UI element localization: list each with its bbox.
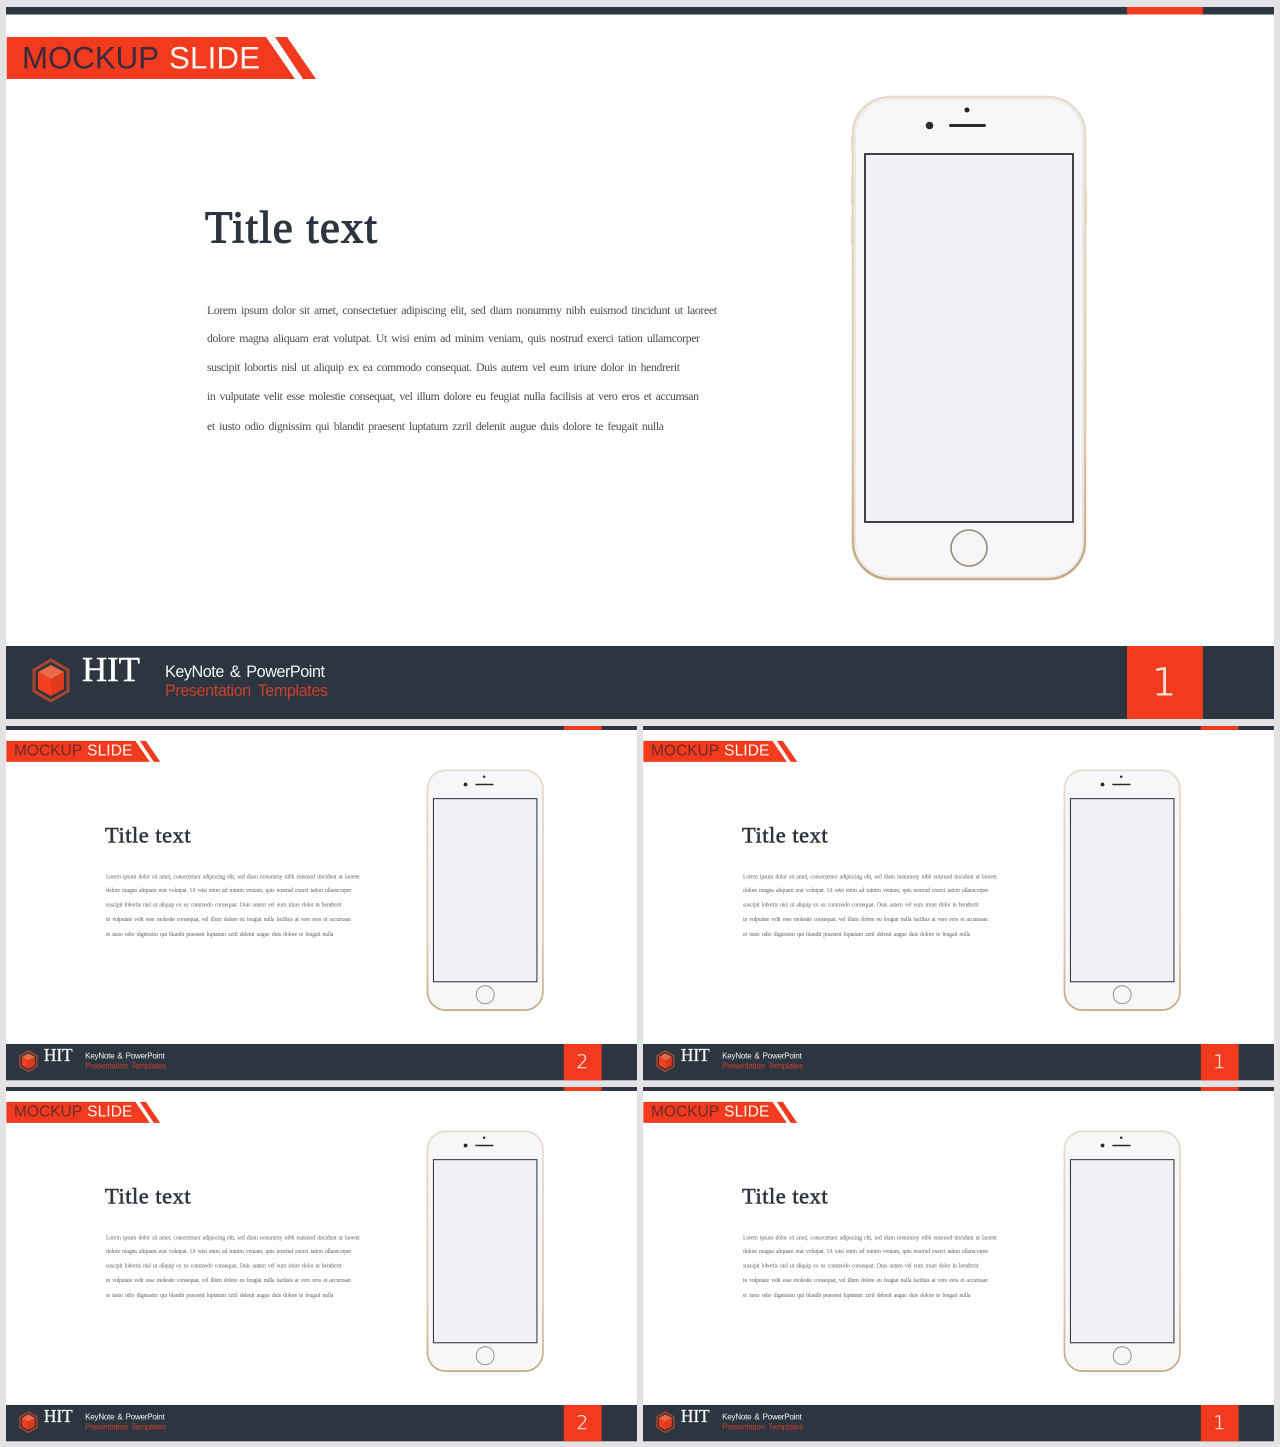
footer bar xyxy=(6,646,1274,719)
tagline xyxy=(165,663,328,700)
body text: dolore magna aliquam erat volutpat. Ut wisi enim ad minim veniam, quis nostrud exerci tation ullamcorper xyxy=(106,1249,351,1255)
tagline: KeyNote & PowerPoint xyxy=(165,663,326,681)
body text: in vulputate velit esse molestie consequat, vel illum dolore eu feugiat nulla facilisis at vero eros et accumsan xyxy=(106,916,351,923)
title: Title text xyxy=(105,1183,191,1208)
brand name: HIT xyxy=(82,650,140,689)
slide 5: small mockup slide, bottom right xyxy=(643,1087,1274,1441)
title: Title text xyxy=(742,1183,828,1208)
banner: mockup slide xyxy=(643,1102,797,1123)
body text: Lorem ipsum dolor sit amet, consectetuer adipiscing elit, sed diam nonummy nibh euismod tincidunt ut laoreet xyxy=(743,1235,997,1241)
banner: mockup slide: MOCKUP xyxy=(14,1104,82,1121)
page number: 2 xyxy=(576,1411,589,1434)
body text: in vulputate velit esse molestie consequat, vel illum dolore eu feugiat nulla facilisis at vero eros et accumsan xyxy=(743,1277,988,1284)
top bar xyxy=(6,726,637,730)
title: Title text xyxy=(742,822,828,847)
tagline: KeyNote & PowerPoint xyxy=(85,1412,165,1421)
banner: mockup slide: SLIDE xyxy=(724,743,769,760)
banner: mockup slide: MOCKUP xyxy=(651,1104,719,1121)
body text: dolore magna aliquam erat volutpat. Ut wisi enim ad minim veniam, quis nostrud exerci tation ullamcorper xyxy=(743,1249,988,1255)
brand name: HIT xyxy=(681,1045,710,1065)
icon: phone mockup xyxy=(427,770,544,1010)
icon: hexagon cube logo xyxy=(34,660,68,701)
body text xyxy=(743,874,997,938)
body text xyxy=(207,303,718,433)
banner: mockup slide: MOCKUP xyxy=(22,40,159,76)
tagline: KeyNote & PowerPoint xyxy=(722,1412,802,1421)
banner: mockup slide: SLIDE xyxy=(87,1104,132,1121)
page number xyxy=(1201,1044,1239,1080)
banner: mockup slide xyxy=(643,741,797,762)
banner: mockup slide: MOCKUP xyxy=(14,743,82,760)
banner: mockup slide xyxy=(6,741,160,762)
top bar xyxy=(6,7,1274,14)
icon: hexagon cube logo xyxy=(657,1051,674,1071)
footer bar xyxy=(643,1044,1274,1080)
body text: et iusto odio dignissim qui blandit praesent luptatum zzril delenit augue duis dolore te feugait nulla xyxy=(207,419,665,433)
body text: suscipit lobortis nisl ut aliquip ex ea commodo consequat. Duis autem vel eum iriure dolor in hendrerit xyxy=(207,360,681,374)
icon: phone mockup xyxy=(852,97,1086,579)
tagline: KeyNote & PowerPoint xyxy=(85,1051,165,1060)
tagline: Presentation Templates xyxy=(85,1061,166,1070)
body text: suscipit lobortis nisl ut aliquip ex ea commodo consequat. Duis autem vel eum iriure dolor in hendrerit xyxy=(106,903,342,909)
body text xyxy=(106,1235,360,1299)
body text: dolore magna aliquam erat volutpat. Ut wisi enim ad minim veniam, quis nostrud exerci tation ullamcorper xyxy=(106,888,351,894)
tagline xyxy=(722,1051,803,1070)
banner: mockup slide: SLIDE xyxy=(87,743,132,760)
tagline: KeyNote & PowerPoint xyxy=(722,1051,802,1060)
body text: in vulputate velit esse molestie consequat, vel illum dolore eu feugiat nulla facilisis at vero eros et accumsan xyxy=(207,389,699,403)
tagline: Presentation Templates xyxy=(722,1422,803,1431)
tagline: Presentation Templates xyxy=(722,1061,803,1070)
page number: 2 xyxy=(576,1050,589,1073)
tagline xyxy=(85,1051,166,1070)
page number xyxy=(564,1044,602,1080)
body text: Lorem ipsum dolor sit amet, consectetuer adipiscing elit, sed diam nonummy nibh euismod tincidunt ut laoreet xyxy=(743,874,997,880)
tagline: Presentation Templates xyxy=(165,682,328,700)
page number: 1 xyxy=(1151,660,1177,706)
body text: et iusto odio dignissim qui blandit praesent luptatum zzril delenit augue duis dolore te feugait nulla xyxy=(106,931,334,938)
banner: mockup slide xyxy=(6,1102,160,1123)
banner: mockup slide: SLIDE xyxy=(169,40,260,76)
page number xyxy=(1201,1405,1239,1441)
page number: 1 xyxy=(1213,1050,1226,1073)
brand name: HIT xyxy=(44,1045,73,1065)
body text xyxy=(743,1235,997,1299)
icon: hexagon cube logo xyxy=(20,1412,37,1432)
body text: et iusto odio dignissim qui blandit praesent luptatum zzril delenit augue duis dolore te feugait nulla xyxy=(106,1292,334,1299)
icon: hexagon cube logo xyxy=(20,1051,37,1071)
slide 1: large mockup slide xyxy=(6,7,1274,719)
tagline xyxy=(85,1412,166,1431)
icon: phone mockup xyxy=(1064,1131,1181,1371)
body text: Lorem ipsum dolor sit amet, consectetuer adipiscing elit, sed diam nonummy nibh euismod tincidunt ut laoreet xyxy=(207,303,718,317)
footer bar xyxy=(643,1405,1274,1441)
icon: phone mockup xyxy=(1064,770,1181,1010)
body text: dolore magna aliquam erat volutpat. Ut wisi enim ad minim veniam, quis nostrud exerci tation ullamcorper xyxy=(207,331,700,345)
body text: dolore magna aliquam erat volutpat. Ut wisi enim ad minim veniam, quis nostrud exerci tation ullamcorper xyxy=(743,888,988,894)
title: Title text xyxy=(105,822,191,847)
body text: et iusto odio dignissim qui blandit praesent luptatum zzril delenit augue duis dolore te feugait nulla xyxy=(743,1292,971,1299)
body text: Lorem ipsum dolor sit amet, consectetuer adipiscing elit, sed diam nonummy nibh euismod tincidunt ut laoreet xyxy=(106,874,360,880)
page number xyxy=(564,1405,602,1441)
banner: mockup slide: SLIDE xyxy=(724,1104,769,1121)
footer bar xyxy=(6,1405,637,1441)
body text: suscipit lobortis nisl ut aliquip ex ea commodo consequat. Duis autem vel eum iriure dolor in hendrerit xyxy=(743,903,979,909)
body text: suscipit lobortis nisl ut aliquip ex ea commodo consequat. Duis autem vel eum iriure dolor in hendrerit xyxy=(106,1264,342,1270)
brand name: HIT xyxy=(44,1406,73,1426)
top bar xyxy=(643,1087,1274,1091)
tagline: Presentation Templates xyxy=(85,1422,166,1431)
slide 2: small mockup slide, top left xyxy=(6,726,637,1080)
banner: mockup slide: MOCKUP xyxy=(651,743,719,760)
slide 3: small mockup slide, top right xyxy=(643,726,1274,1080)
icon: hexagon cube logo xyxy=(657,1412,674,1432)
tagline xyxy=(722,1412,803,1431)
icon: phone mockup xyxy=(427,1131,544,1371)
body text xyxy=(106,874,360,938)
title: Title text xyxy=(205,202,377,252)
page number xyxy=(1127,646,1203,719)
footer bar xyxy=(6,1044,637,1080)
top bar xyxy=(6,1087,637,1091)
body text: suscipit lobortis nisl ut aliquip ex ea commodo consequat. Duis autem vel eum iriure dolor in hendrerit xyxy=(743,1264,979,1270)
page number: 1 xyxy=(1213,1411,1226,1434)
body text: Lorem ipsum dolor sit amet, consectetuer adipiscing elit, sed diam nonummy nibh euismod tincidunt ut laoreet xyxy=(106,1235,360,1241)
brand name: HIT xyxy=(681,1406,710,1426)
banner: mockup slide xyxy=(7,37,316,79)
body text: et iusto odio dignissim qui blandit praesent luptatum zzril delenit augue duis dolore te feugait nulla xyxy=(743,931,971,938)
top bar xyxy=(643,726,1274,730)
slide 4: small mockup slide, bottom left xyxy=(6,1087,637,1441)
body text: in vulputate velit esse molestie consequat, vel illum dolore eu feugiat nulla facilisis at vero eros et accumsan xyxy=(106,1277,351,1284)
body text: in vulputate velit esse molestie consequat, vel illum dolore eu feugiat nulla facilisis at vero eros et accumsan xyxy=(743,916,988,923)
